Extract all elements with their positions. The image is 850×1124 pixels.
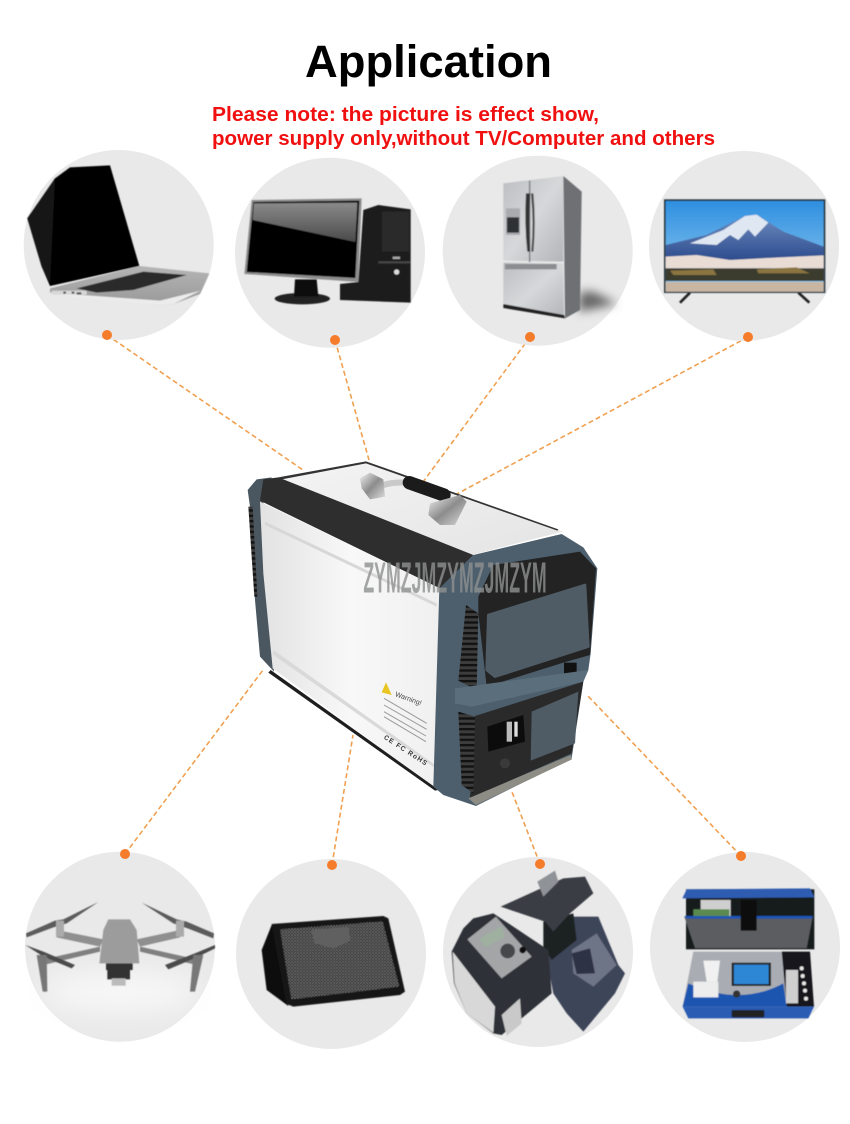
ports panel: [487, 715, 525, 752]
panel: drone: [25, 852, 215, 1042]
connector dots: [102, 330, 753, 870]
side panel: [260, 502, 439, 787]
panel: television: [649, 151, 839, 341]
panel: laptop: [24, 150, 214, 340]
upper front: [478, 552, 596, 687]
control panel: [467, 917, 532, 978]
panel: power station: [248, 461, 597, 806]
dashed connector lines: [107, 335, 748, 865]
bottom edge: [268, 670, 438, 791]
black top edge: [278, 461, 558, 531]
handle: [360, 473, 467, 525]
bottom foot: [468, 755, 572, 805]
lid: [501, 877, 593, 932]
lower front: [470, 682, 583, 798]
panel: desktop computer: [235, 158, 425, 348]
power button: [500, 758, 510, 768]
left end cap: [248, 477, 274, 672]
panel: medical device: [443, 857, 633, 1047]
red note: Please note: the picture is effect show,: [212, 104, 599, 126]
top panel: [278, 462, 563, 555]
red note: [212, 104, 715, 150]
fins lower: [458, 712, 475, 793]
panel: power station: ZYMZJMZYMZJMZYM: [363, 555, 547, 603]
water tank: [545, 917, 625, 1032]
warning label: CE FC RoHS: [382, 734, 428, 768]
title: Application: [305, 36, 552, 87]
dark band: [260, 477, 473, 588]
DC cover: [531, 692, 578, 761]
red note: power supply only,without TV/Computer and others: [212, 128, 715, 150]
AC cover: [487, 585, 588, 677]
warning label: [382, 682, 428, 768]
front frame: [433, 534, 597, 806]
panel: speaker: [236, 859, 426, 1049]
panel: instrument case: [650, 852, 840, 1042]
switch: [564, 663, 577, 674]
side fins upper: [458, 605, 478, 690]
divider band: [455, 670, 588, 707]
main body: [452, 913, 552, 1035]
warning label: Warning!: [394, 691, 422, 707]
panel: refrigerator: [443, 156, 633, 346]
